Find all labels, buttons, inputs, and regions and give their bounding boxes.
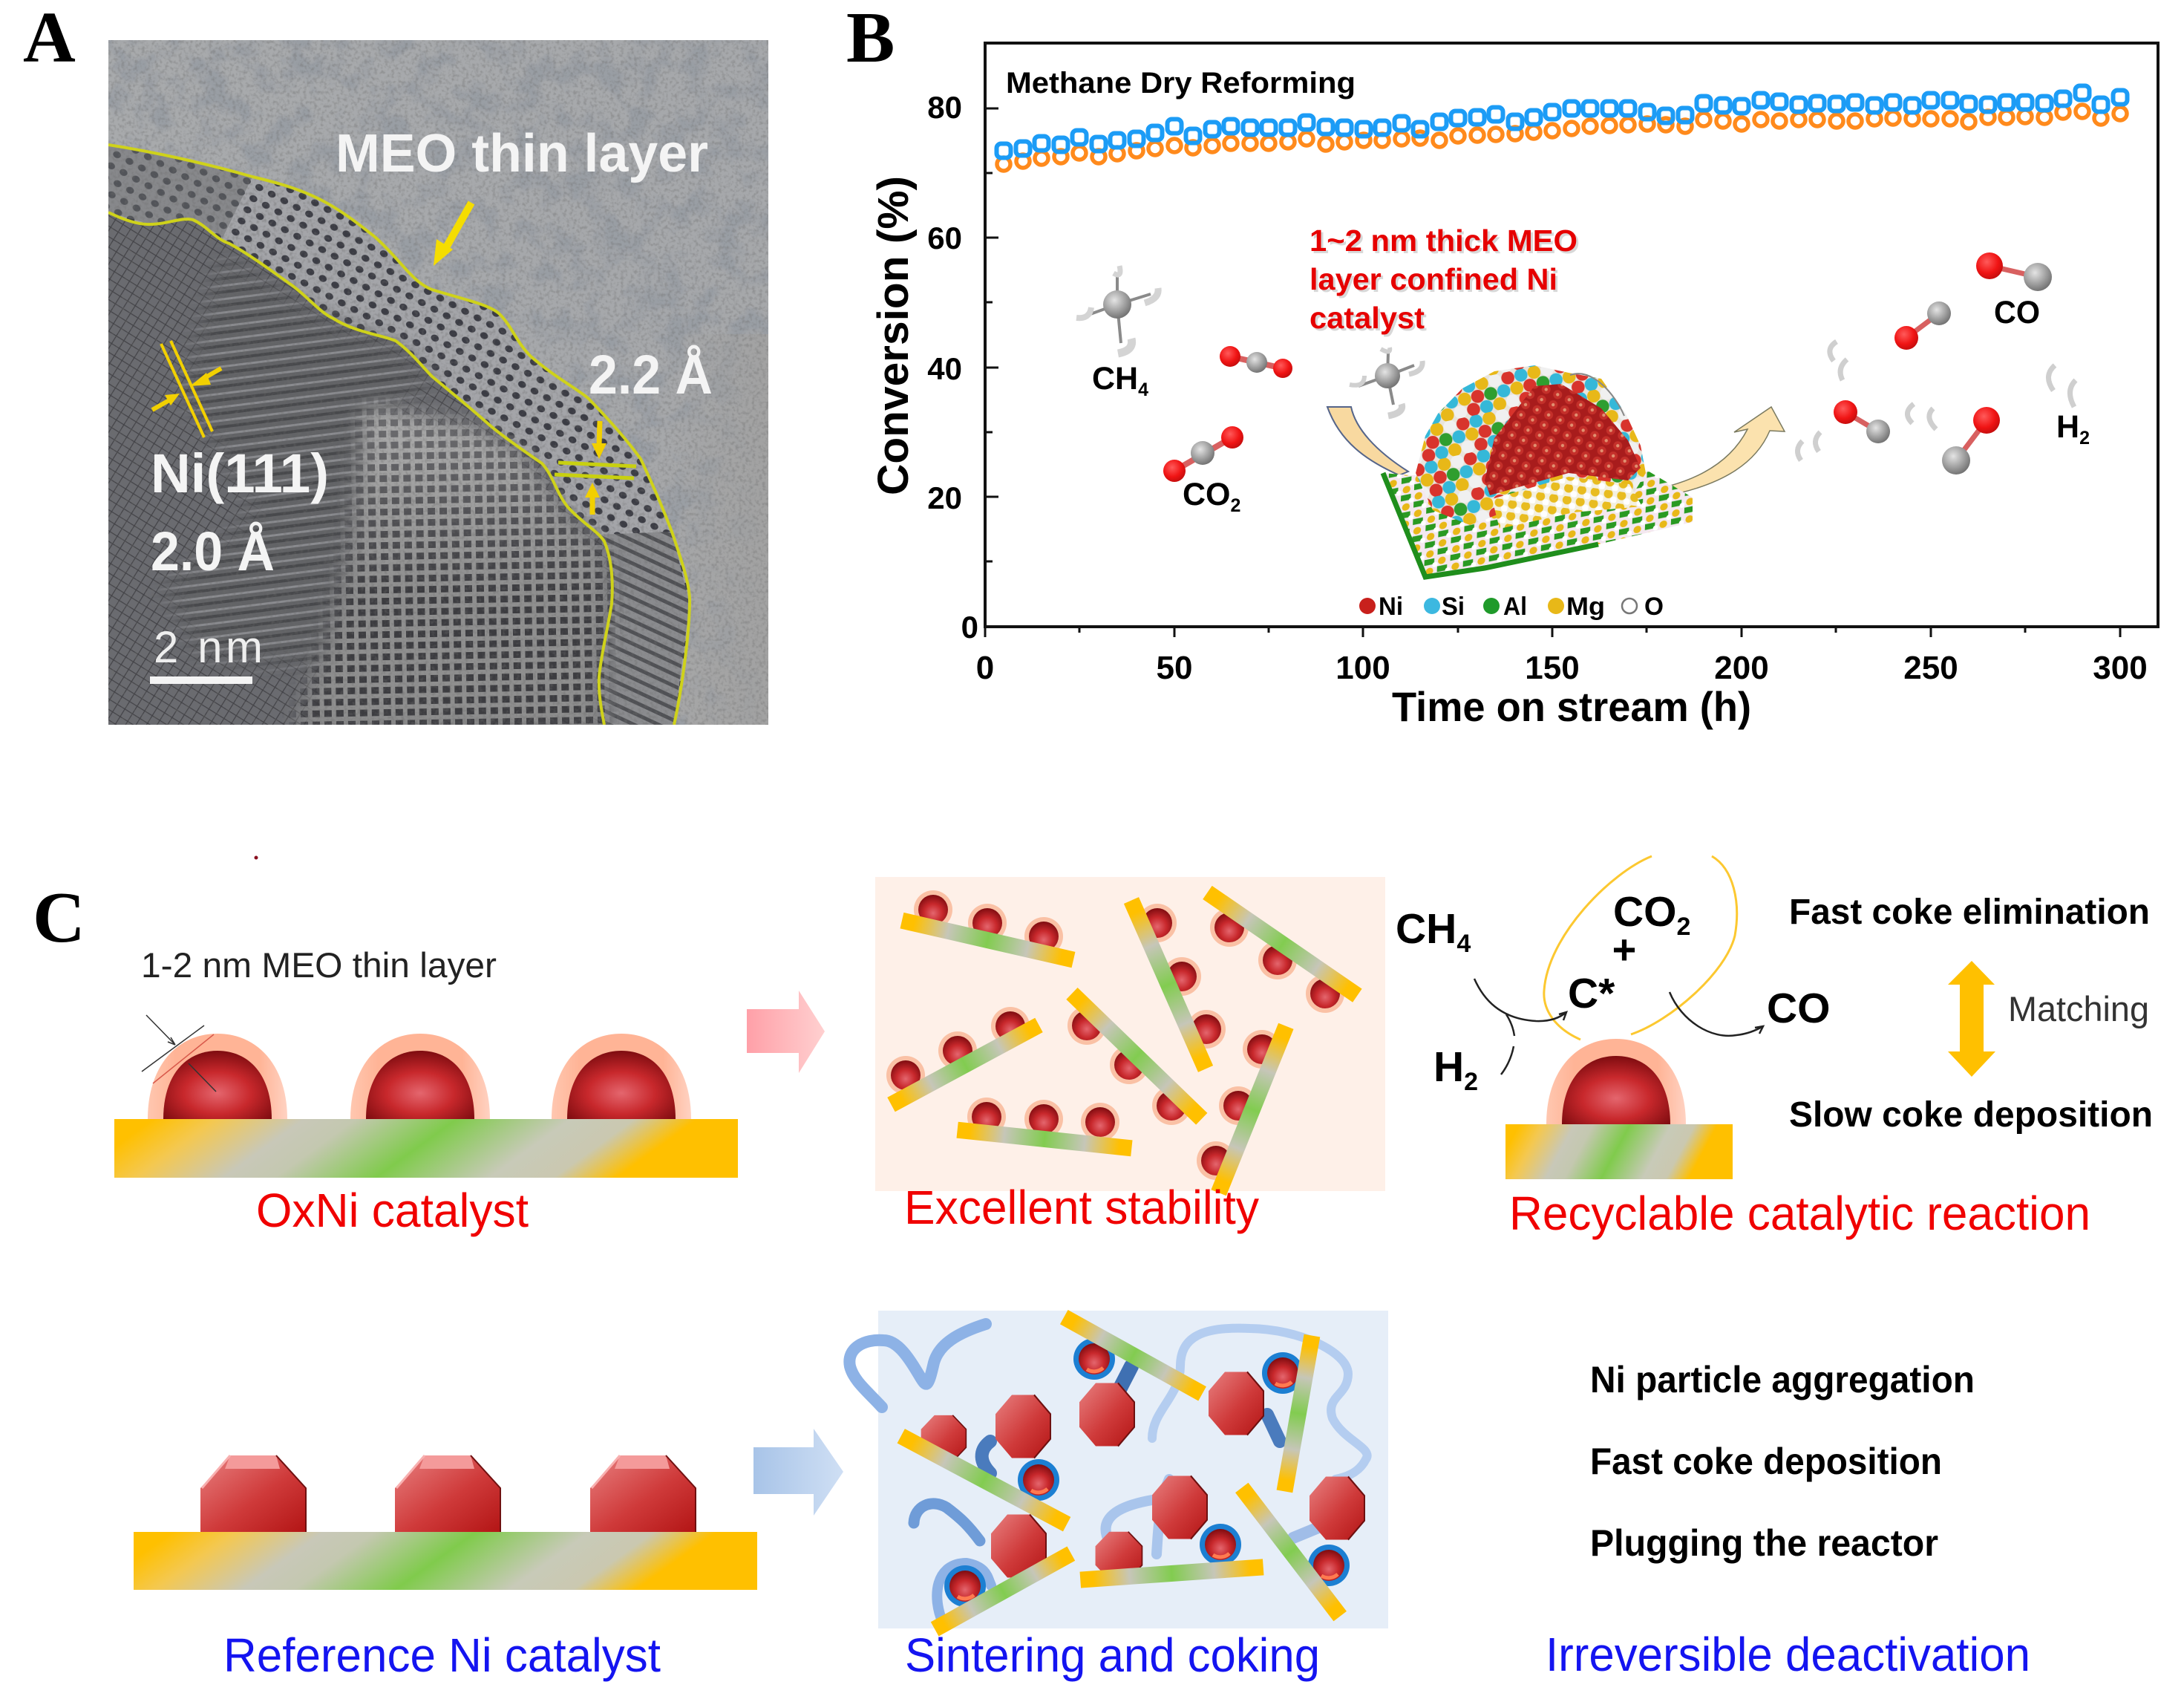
y axis tick labels: 20 — [927, 480, 962, 515]
label: CO2: CO — [1613, 888, 1676, 936]
scale bar — [150, 676, 252, 684]
support bar — [114, 1119, 738, 1178]
callout: thick MEO layer: catalyst — [1310, 301, 1425, 335]
legend: elements: Mg — [1566, 593, 1605, 621]
x axis tick labels: 100 — [1335, 650, 1390, 686]
label: CO: CO — [1994, 295, 2040, 330]
callout: thick MEO layer: layer confined Ni — [1310, 262, 1557, 296]
callout: thick MEO layer — [1310, 224, 1580, 337]
panel A: TEM micrograph — [108, 40, 768, 725]
molecules: CO products — [1834, 252, 2052, 475]
label: CH4: CH — [1396, 905, 1456, 953]
x axis tick labels — [976, 650, 2148, 686]
label: Ni(111): Ni(111) — [151, 443, 329, 504]
molecule: CO2 upper — [1220, 346, 1292, 378]
thickness pointer marks — [142, 1015, 216, 1092]
label: CH4: 4 — [1456, 930, 1471, 958]
panel: OxNi catalyst schematic — [114, 945, 738, 1237]
x axis tick labels: 50 — [1157, 650, 1192, 686]
support rods — [898, 1310, 1347, 1637]
arrow: pink — [747, 991, 825, 1073]
stray mark — [254, 855, 258, 860]
label: Slow coke deposition: Slow coke deposition — [1789, 1095, 2153, 1135]
series: orange circles — [997, 105, 2127, 171]
arrow: blue — [753, 1429, 843, 1516]
label: CO2: 2 — [1231, 495, 1240, 516]
panel label A: A — [23, 0, 76, 78]
label: H2: H — [2056, 409, 2079, 445]
label: CO2: 2 — [1676, 913, 1690, 941]
panel: reference Ni catalyst schematic — [134, 1455, 757, 1682]
panel: recyclable catalytic reaction — [1396, 856, 2153, 1240]
x axis title: Time on stream (h) — [1392, 683, 1751, 730]
catalyst domes — [148, 1034, 691, 1119]
label: H2: H — [1433, 1043, 1464, 1091]
label: plus: + — [1612, 926, 1636, 973]
label: H2: 2 — [2079, 428, 2090, 449]
label: Sintering and coking: Sintering and coking — [905, 1628, 1320, 1682]
label: Reference Ni catalyst: Reference Ni catalyst — [223, 1628, 661, 1682]
arrow: reactants into catalyst — [1327, 407, 1408, 475]
label: 2.0 angstrom: 2.0 Å — [151, 521, 275, 582]
label: 1-2 nm MEO thin layer: 1-2 nm MEO thin layer — [141, 945, 497, 985]
molecule: CH4 near catalyst — [1350, 348, 1422, 416]
y axis tick labels: 80 — [927, 90, 962, 125]
MEO layer outer boundary — [108, 145, 690, 725]
y axis tick labels: 60 — [927, 221, 962, 255]
arrow: MEO thin layer pointer — [434, 203, 471, 266]
coke filaments — [849, 1324, 1367, 1623]
label: H2: 2 — [1464, 1068, 1478, 1096]
legend: elements: Si — [1442, 593, 1465, 621]
x axis tick labels: 300 — [2093, 650, 2148, 686]
callout: thick MEO layer: 1~2 nm thick MEO — [1310, 224, 1577, 258]
reaction arrows — [1474, 979, 1763, 1074]
text block: deactivation causes — [1546, 1359, 2030, 1681]
panel: sintering and coking — [849, 1310, 1388, 1682]
x axis tick labels: 200 — [1714, 650, 1769, 686]
arrow: products out of catalyst — [1670, 407, 1785, 493]
label: Ni particle aggregation: Ni particle aggregation — [1590, 1359, 1975, 1400]
reaction cycle ellipse — [1544, 856, 1737, 1040]
y axis tick labels — [927, 90, 978, 645]
molecules: H2 products — [1797, 342, 2076, 460]
label: Recyclable catalytic reaction: Recyclable catalytic reaction — [1509, 1187, 2090, 1240]
molecule: CH4 left — [1076, 266, 1158, 353]
callout: thick MEO layer: catalyst — [1312, 303, 1427, 337]
panel label B: B — [846, 0, 895, 78]
panel: excellent stability — [875, 877, 1385, 1234]
label: Excellent stability: Excellent stability — [904, 1181, 1259, 1234]
y axis title: Conversion (%) — [869, 176, 918, 495]
scale bar label: 2 nm — [154, 622, 263, 672]
label: OxNi catalyst: OxNi catalyst — [256, 1184, 529, 1237]
series: blue rounded squares — [996, 86, 2128, 157]
label: CO2: CO — [1183, 477, 1231, 512]
panel B: conversion chart — [869, 43, 2158, 730]
label: Fast coke deposition: Fast coke deposition — [1590, 1441, 1942, 1482]
support rods — [887, 886, 1362, 1196]
y axis tick labels: 0 — [961, 610, 978, 645]
label: Fast coke elimination: Fast coke elimination — [1789, 893, 2150, 932]
catalyst nanoparticle model — [1383, 365, 1693, 577]
supported particles — [886, 890, 1344, 1180]
sintered Ni particles — [921, 1372, 1364, 1579]
label: Irreversible deactivation: Irreversible deactivation — [1546, 1628, 2030, 1681]
legend: elements: Al — [1503, 593, 1527, 621]
label: CH4: CH — [1092, 361, 1138, 397]
label: Matching: Matching — [2008, 989, 2149, 1028]
label: C star: C* — [1568, 970, 1615, 1017]
double arrow: matching — [1948, 961, 1995, 1077]
support bar — [1505, 1124, 1733, 1179]
legend: elements: Ni — [1379, 593, 1403, 621]
legend: elements — [1359, 593, 1664, 621]
callout: thick MEO layer: layer confined Ni — [1312, 264, 1560, 299]
faceted Ni particles — [200, 1455, 696, 1532]
support bar — [134, 1532, 757, 1590]
x axis tick labels: 250 — [1903, 650, 1958, 686]
catalyst dome — [1546, 1039, 1686, 1124]
molecule: CO2 lower — [1163, 426, 1243, 482]
x axis tick labels: 150 — [1525, 650, 1580, 686]
legend: elements: O — [1644, 593, 1664, 621]
label: CH4: 4 — [1138, 379, 1148, 400]
y axis tick labels: 40 — [927, 351, 962, 386]
chart axes frame — [985, 43, 2158, 637]
label: MEO thin layer: MEO thin layer — [336, 124, 708, 183]
panel label C: C — [33, 878, 85, 958]
label: CO: CO — [1767, 985, 1831, 1032]
lattice lines: MEO 2.2 angstrom spacing — [555, 421, 636, 515]
label: Plugging the reactor: Plugging the reactor — [1590, 1522, 1938, 1564]
coked Ni particles — [944, 1338, 1350, 1607]
lattice lines: Ni(111) spacing — [152, 341, 221, 437]
MEO layer inner boundary — [108, 212, 612, 725]
label: 2.2 angstrom: 2.2 Å — [589, 344, 713, 405]
chart title: Methane Dry Reforming — [1006, 67, 1356, 100]
x axis tick labels: 0 — [976, 650, 994, 686]
callout: thick MEO layer: 1~2 nm thick MEO — [1312, 226, 1580, 260]
